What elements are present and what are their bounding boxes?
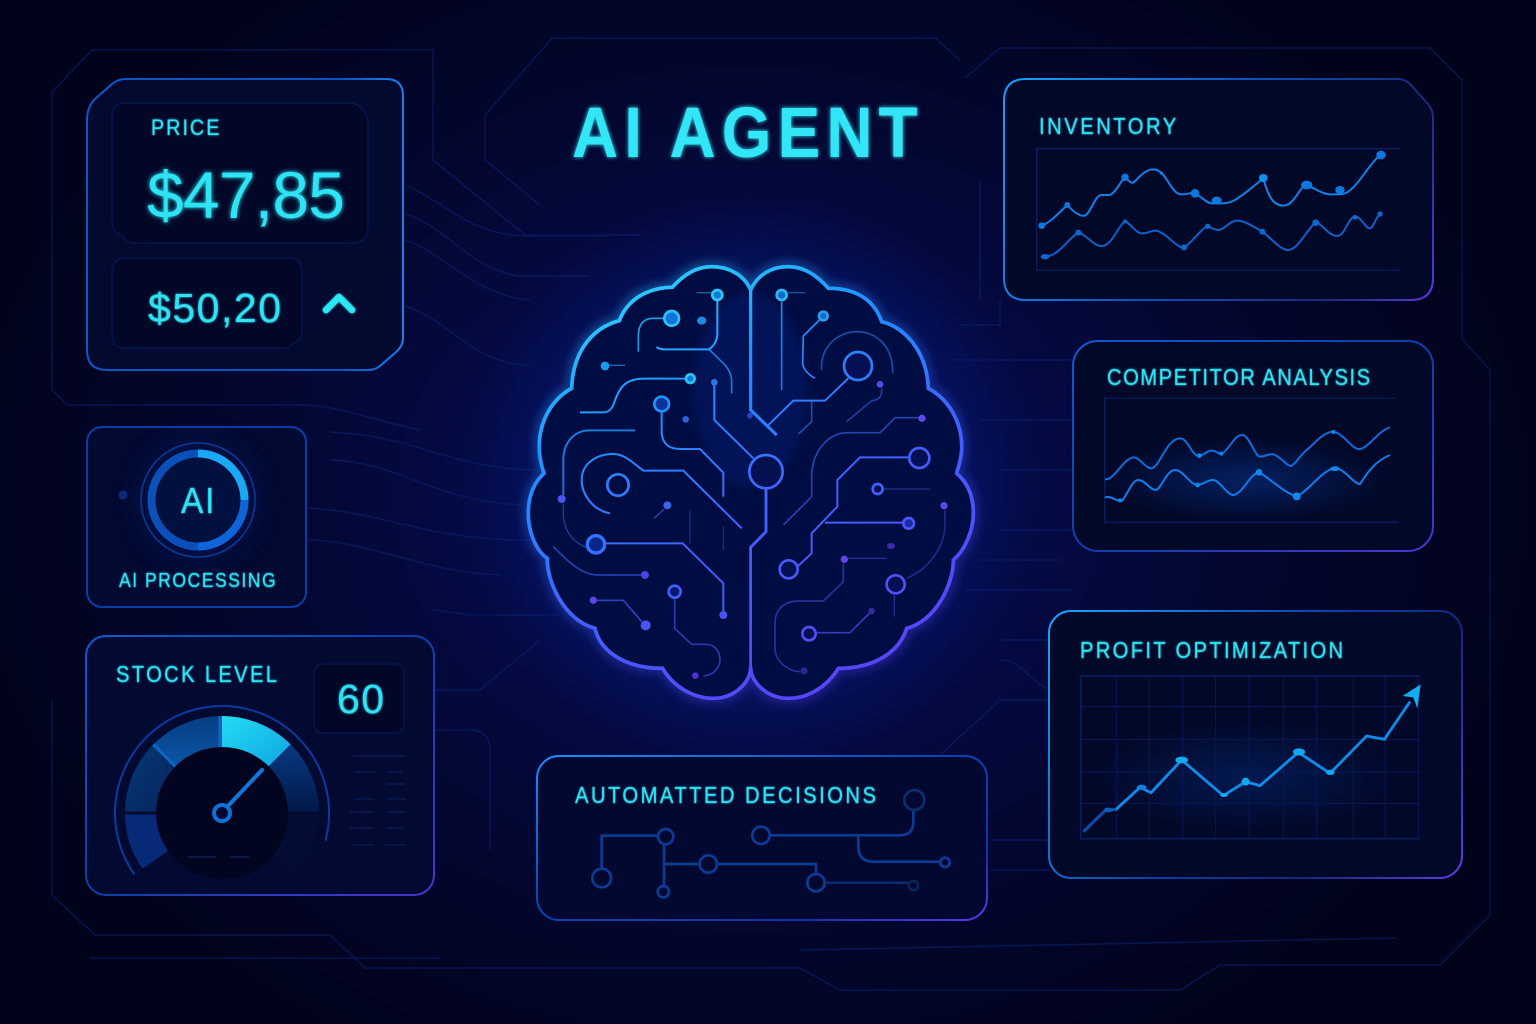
competitor chart: [1103, 398, 1398, 523]
icon: up chevron: [326, 297, 352, 310]
heading: profit optimization: PROFIT OPTIMIZATION: [1080, 637, 1343, 663]
decisions frame: [537, 756, 987, 920]
inventory frame: [1004, 79, 1433, 300]
panel: AI processing: [87, 427, 306, 607]
brain glow: [460, 190, 1040, 770]
right hemisphere circuits: [751, 290, 945, 672]
dial text: AI: [181, 482, 214, 521]
panel: automated decisions: [537, 756, 987, 920]
title: AI AGENT: [572, 94, 918, 173]
decision tree: [592, 790, 950, 897]
panel: competitor analysis: [1073, 341, 1433, 551]
brain dots: [558, 317, 948, 679]
heading: inventory: INVENTORY: [1039, 113, 1176, 139]
value box: [314, 664, 404, 733]
brain illustration: [528, 267, 973, 698]
profit frame: [1049, 611, 1462, 878]
heading: competitor analysis: COMPETITOR ANALYSIS: [1107, 364, 1370, 390]
current price value: $47,85: [147, 158, 345, 232]
current price box: [112, 103, 368, 243]
brain nodes: [587, 290, 929, 640]
AI panel frame: [87, 427, 306, 607]
brain outline halo: [528, 267, 973, 698]
value: 60: [337, 676, 384, 722]
next price box: [112, 258, 302, 348]
label: price: PRICE: [151, 116, 219, 140]
AI dial: [136, 438, 260, 562]
brain glow centre: [693, 293, 807, 487]
label: stock level: STOCK LEVEL: [116, 661, 277, 687]
left hemisphere circuits: [553, 293, 753, 676]
brain outline: [528, 267, 973, 698]
profit chart: [1081, 676, 1421, 839]
competitor frame: [1073, 341, 1433, 551]
price frame: [87, 79, 403, 370]
panel: price: [87, 79, 403, 370]
stock frame: [86, 636, 434, 895]
next price value: $50,20: [148, 285, 281, 331]
inventory chart: [1037, 149, 1400, 270]
heading: automated decisions: AUTOMATTED DECISIONS: [575, 782, 876, 808]
panel: inventory: [1004, 79, 1433, 300]
status dot: [118, 490, 128, 500]
gauge: [115, 706, 329, 879]
panel: stock level: [86, 636, 434, 895]
label: AI processing: AI PROCESSING: [119, 569, 276, 591]
panel: profit optimization: [1049, 611, 1462, 878]
scale ticks: [350, 756, 406, 845]
